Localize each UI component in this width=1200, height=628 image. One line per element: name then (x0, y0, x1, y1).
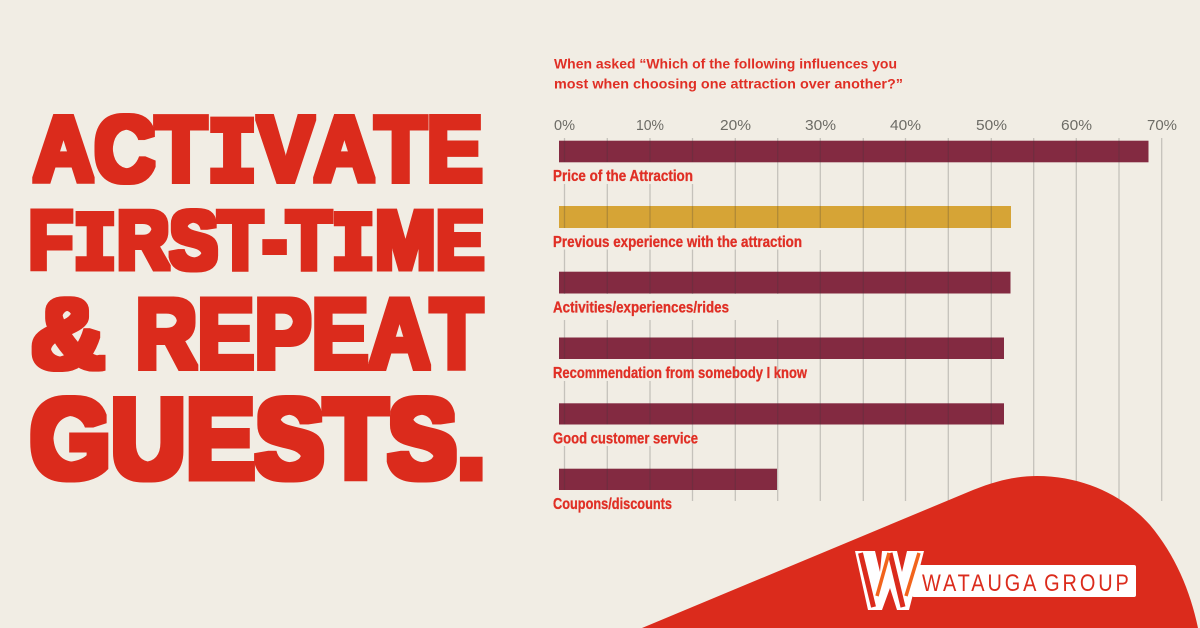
axis labels: 40% (890, 117, 921, 134)
axis labels: 60% (1061, 117, 1092, 134)
logo wordmark: WATAUGA GROUP (922, 569, 1132, 596)
category labels: Price of the Attraction (553, 168, 693, 185)
category labels: Activities/experiences/rides (553, 300, 729, 317)
category labels: Good customer service (553, 430, 698, 448)
axis labels: 0% (554, 117, 575, 134)
title: ACTIVATE (33, 97, 483, 209)
category labels: Previous experience with the attraction (553, 234, 802, 251)
axis labels: 50% (976, 117, 1007, 134)
bar: previous experience (559, 206, 1011, 228)
category labels: Recommendation from somebody I know (553, 365, 808, 382)
bar: activities (559, 272, 1010, 294)
axis labels (554, 117, 1177, 134)
bars (559, 141, 1148, 490)
axis labels: 70% (1147, 117, 1177, 134)
title: FIRST-TIME (28, 193, 484, 294)
title: REPEAT (135, 278, 483, 389)
logo W mark (855, 551, 924, 610)
chart question (554, 56, 903, 92)
axis labels: 20% (720, 117, 751, 134)
bar: price of the attraction (559, 141, 1148, 162)
logo (855, 551, 1136, 610)
title: & (30, 279, 106, 389)
axis labels: 10% (636, 117, 664, 134)
category labels (553, 168, 808, 513)
grid lines (564, 138, 1162, 501)
red corner shape (642, 476, 1198, 628)
bar chart (553, 117, 1177, 513)
title: GUESTS. (30, 376, 486, 502)
chart question: When asked “Which of the following influences you (554, 56, 897, 72)
bar: coupons (559, 469, 777, 490)
bar: customer service (559, 403, 1004, 424)
logo text box (912, 565, 1136, 597)
title (28, 97, 486, 502)
axis labels: 30% (805, 117, 836, 134)
bar: recommendation (559, 338, 1004, 359)
chart question: most when choosing one attraction over another?” (554, 76, 903, 92)
category labels: Coupons/discounts (553, 496, 672, 513)
